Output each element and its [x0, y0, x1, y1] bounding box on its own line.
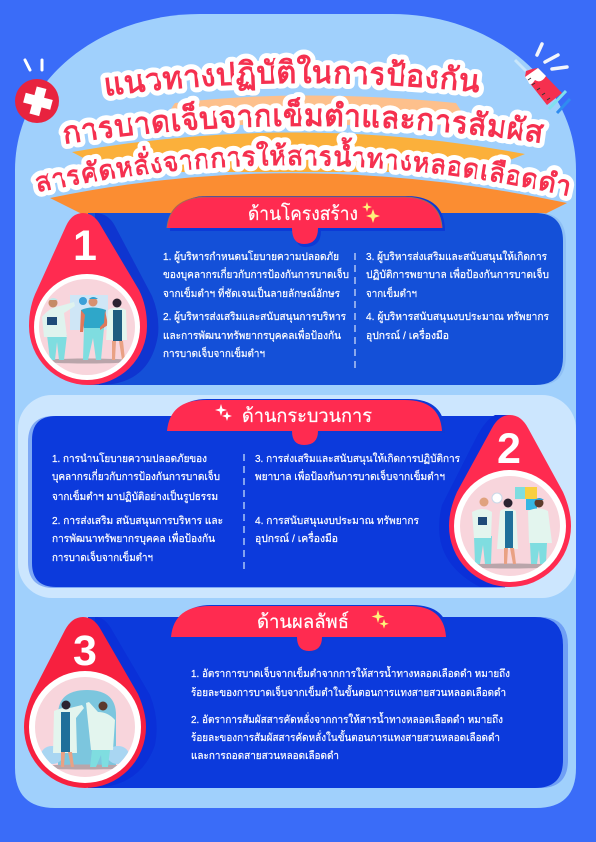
- text: structure column 1: การบาดเจ็บจากเข็มตำฯ: [163, 346, 265, 360]
- drop 3 with team illustration: 3: [73, 627, 97, 675]
- text: process column 1: จากเข็มตำฯ มาปฏิบัติอย่างเป็นรูปธรรม: [52, 489, 218, 503]
- text: structure column 1: 1. ผู้บริหารกำหนดนโยบายความปลอดภัย: [163, 250, 339, 263]
- text: process column 2: พยาบาล เพื่อป้องกันการบาดเจ็บจากเข็มตำฯ: [255, 469, 445, 483]
- ribbon: process heading: ด้านกระบวนการ: [242, 406, 372, 427]
- panel: process: [18, 395, 576, 598]
- text: process column 1: บุคลากรเกี่ยวกับการป้องกันการบาดเจ็บ: [52, 469, 220, 483]
- ribbon: structure heading: ด้านโครงสร้าง: [248, 202, 358, 225]
- text: process column 1: การบาดเจ็บจากเข็มตำฯ: [52, 550, 153, 564]
- panel: structure: [88, 196, 566, 385]
- text: outcomes: ร้อยละของการสัมผัสสารคัดหลั่งในขั้นตอนการแทงสายสวนหลอดเลือดดำ: [191, 730, 500, 744]
- text: process column 1: การพัฒนาทรัพยากรบุคคล เพื่อป้องกัน: [52, 531, 215, 545]
- text: structure column 2: จากเข็มตำฯ: [366, 286, 417, 300]
- text: process column 2: อุปกรณ์ / เครื่องมือ: [255, 531, 338, 545]
- text: structure column 2: 3. ผู้บริหารส่งเสริมและสนับสนุนให้เกิดการ: [366, 250, 547, 263]
- drop 1 with team illustration: [29, 213, 158, 385]
- title: การบาดเจ็บจากเข็มตำและการสัมผัส: [58, 92, 550, 149]
- text: structure column 2: อุปกรณ์ / เครื่องมือ: [366, 328, 449, 342]
- text: outcomes: 2. อัตราการสัมผัสสารคัดหลั่งจากการให้สารน้ำทางหลอดเลือดดำ หมายถึง: [191, 712, 503, 726]
- illustration: two medical staff high five: [37, 690, 133, 770]
- title: แนวทางปฏิบัติในการป้องกัน: [100, 50, 484, 101]
- title: สารคัดหลั่งจากการให้สารน้ำทางหลอดเลือดดำ: [30, 132, 574, 201]
- text: outcomes: ร้อยละของการบาดเจ็บจากเข็มตำในขั้นตอนการแทงสายสวนหลอดเลือดดำ: [191, 685, 506, 699]
- drop 3 with team illustration: [24, 617, 157, 788]
- text: structure column 1: ของบุคลากรเกี่ยวกับการป้องกันการบาดเจ็บ: [163, 267, 349, 281]
- text: process column 2: 3. การส่งเสริมและสนับสนุนให้เกิดการปฏิบัติการ: [255, 452, 460, 465]
- ribbon: outcomes heading: [171, 605, 449, 654]
- icon: syringe: [515, 44, 570, 113]
- text: process column 1: 1. การนำนโยบายความปลอดภัยของ: [52, 452, 207, 465]
- title ribbon bands: [50, 96, 567, 214]
- text: structure column 1: [163, 250, 349, 360]
- text: structure column 1: และการพัฒนาทรัพยากรบุคคลเพื่อป้องกัน: [163, 328, 341, 342]
- text: process column 1: 2. การส่งเสริม สนับสนุนการบริหาร และ: [52, 515, 223, 527]
- text: structure column 2: [366, 250, 549, 342]
- illustration: three medical staff with puzzle: [472, 487, 552, 568]
- text: process column 1: [52, 452, 223, 564]
- title: [30, 50, 574, 201]
- icon: medical cross badge: [15, 60, 59, 123]
- text: process column 2: [255, 452, 460, 545]
- text: outcomes: และการถอดสายสวนหลอดเลือดดำ: [191, 749, 339, 762]
- text: structure column 2: 4. ผู้บริหารสนับสนุนงบประมาณ ทรัพยากร: [366, 311, 549, 323]
- text: outcomes: 1. อัตราการบาดเจ็บจากเข็มตำจากการให้สารน้ำทางหลอดเลือดดำ หมายถึง: [191, 666, 510, 680]
- drop 1 with team illustration: 1: [73, 222, 97, 270]
- ribbon: process heading: [167, 399, 445, 448]
- text: structure column 1: จากเข็มตำฯ ที่ชัดเจนเป็นลายลักษณ์อักษร: [163, 286, 340, 300]
- text: structure column 2: ปฏิบัติการพยาบาล เพื่อป้องกันการบาดเจ็บ: [366, 267, 549, 281]
- text: outcomes: [191, 666, 510, 762]
- illustration: three medical staff: [42, 295, 127, 364]
- text: structure column 1: 2. ผู้บริหารส่งเสริมและสนับสนุนการบริหาร: [163, 311, 346, 323]
- panel: outcomes: [88, 605, 568, 788]
- ribbon: structure heading: [167, 196, 445, 247]
- drop 2 with team illustration: [439, 415, 571, 587]
- drop 2 with team illustration: 2: [497, 425, 521, 473]
- ribbon: outcomes heading: ด้านผลลัพธ์: [257, 611, 349, 633]
- text: process column 2: 4. การสนับสนุนงบประมาณ ทรัพยากร: [255, 515, 419, 527]
